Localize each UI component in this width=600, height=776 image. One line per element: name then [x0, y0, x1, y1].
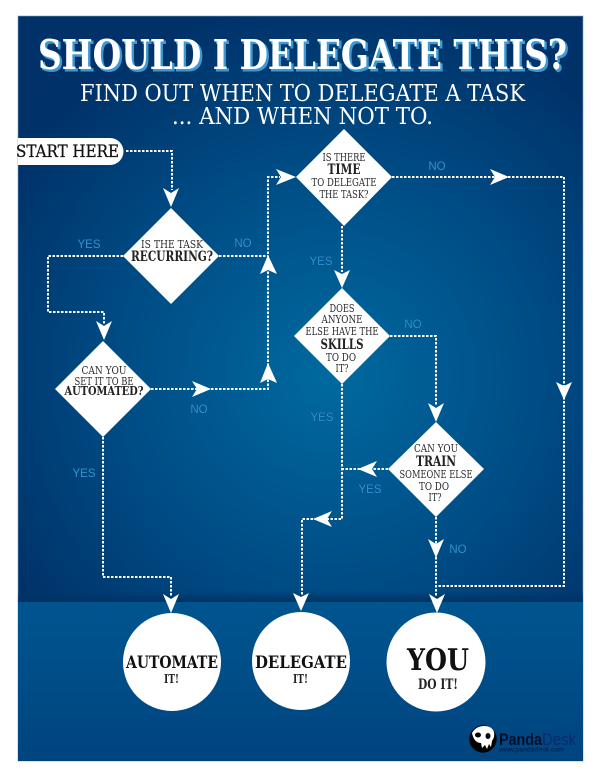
- panel: bottom outcome band: [18, 590, 583, 761]
- outcome: delegate it: IT!: [293, 671, 308, 686]
- start here pill: START HERE: [16, 142, 119, 162]
- yes and no labels: NO: [449, 544, 467, 556]
- decision: is there time: IS THERE: [322, 151, 366, 164]
- logo: PandaDesk: www.pandadesk.com: [498, 748, 564, 754]
- decision: can it be automated: AUTOMATED?: [64, 383, 144, 398]
- logo: PandaDesk: Desk: [542, 731, 577, 749]
- outcome: delegate it: DELEGATE: [255, 653, 347, 672]
- decision: is there time: TIME: [328, 162, 360, 178]
- yes and no labels: NO: [404, 319, 422, 331]
- yes and no labels: NO: [428, 161, 446, 173]
- decision: is there time: [296, 129, 392, 226]
- decision: does anyone have the skills: SKILLS: [320, 337, 364, 353]
- outcome: automate it: [123, 613, 221, 711]
- decision: does anyone have the skills: ANYONE: [321, 313, 362, 326]
- decision: is the task recurring: IS THE TASK: [141, 238, 204, 251]
- subtitle: ... AND WHEN NOT TO.: [172, 104, 433, 130]
- outcome: you do it: YOU: [406, 643, 469, 678]
- outcome: delegate it: [252, 612, 350, 710]
- yes and no labels: YES: [77, 239, 101, 251]
- decision: does anyone have the skills: [294, 288, 390, 384]
- flow connector lines: [48, 151, 564, 597]
- yes and no labels: YES: [72, 468, 96, 480]
- subtitle: [80, 81, 526, 130]
- arrowheads: [96, 169, 572, 613]
- outcome: you do it: DO IT!: [418, 677, 458, 693]
- decision: does anyone have the skills: IT?: [336, 362, 349, 375]
- yes and no labels: NO: [234, 238, 252, 250]
- decision: can it be automated: CAN YOU: [82, 364, 126, 377]
- decision: can you train someone: CAN YOU: [414, 442, 458, 455]
- decision: can you train someone: TRAIN: [416, 454, 456, 470]
- decision: can you train someone: [388, 422, 484, 517]
- decision: is there time: THE TASK?: [320, 188, 369, 201]
- yes and no labels: YES: [309, 256, 333, 268]
- logo: PandaDesk: [469, 725, 577, 754]
- decision: does anyone have the skills: DOES: [330, 302, 354, 315]
- decision: does anyone have the skills: ELSE HAVE THE: [306, 325, 378, 338]
- decision: can it be automated: [55, 341, 151, 437]
- outcome: automate it: AUTOMATE: [125, 653, 218, 672]
- logo: PandaDesk: Panda: [499, 731, 543, 749]
- outcome: you do it: [386, 612, 486, 712]
- outcome: automate it: IT!: [164, 671, 179, 686]
- decision: can it be automated: SET IT TO BE: [74, 375, 134, 388]
- yes and no labels: [72, 161, 467, 556]
- yes and no labels: NO: [190, 404, 208, 416]
- yes and no labels: YES: [358, 484, 382, 496]
- decision: is the task recurring: [123, 208, 219, 304]
- decision: does anyone have the skills: TO DO: [326, 351, 356, 364]
- decision: can you train someone: SOMEONE ELSE: [400, 468, 472, 481]
- decision: can you train someone: TO DO: [419, 480, 449, 493]
- subtitle: FIND OUT WHEN TO DELEGATE A TASK: [80, 81, 526, 107]
- decision: can you train someone: IT?: [428, 491, 442, 504]
- start here pill: [16, 138, 124, 165]
- decision: is the task recurring: RECURRING?: [131, 249, 213, 265]
- yes and no labels: YES: [310, 412, 334, 424]
- decision: is there time: TO DELEGATE: [312, 176, 376, 189]
